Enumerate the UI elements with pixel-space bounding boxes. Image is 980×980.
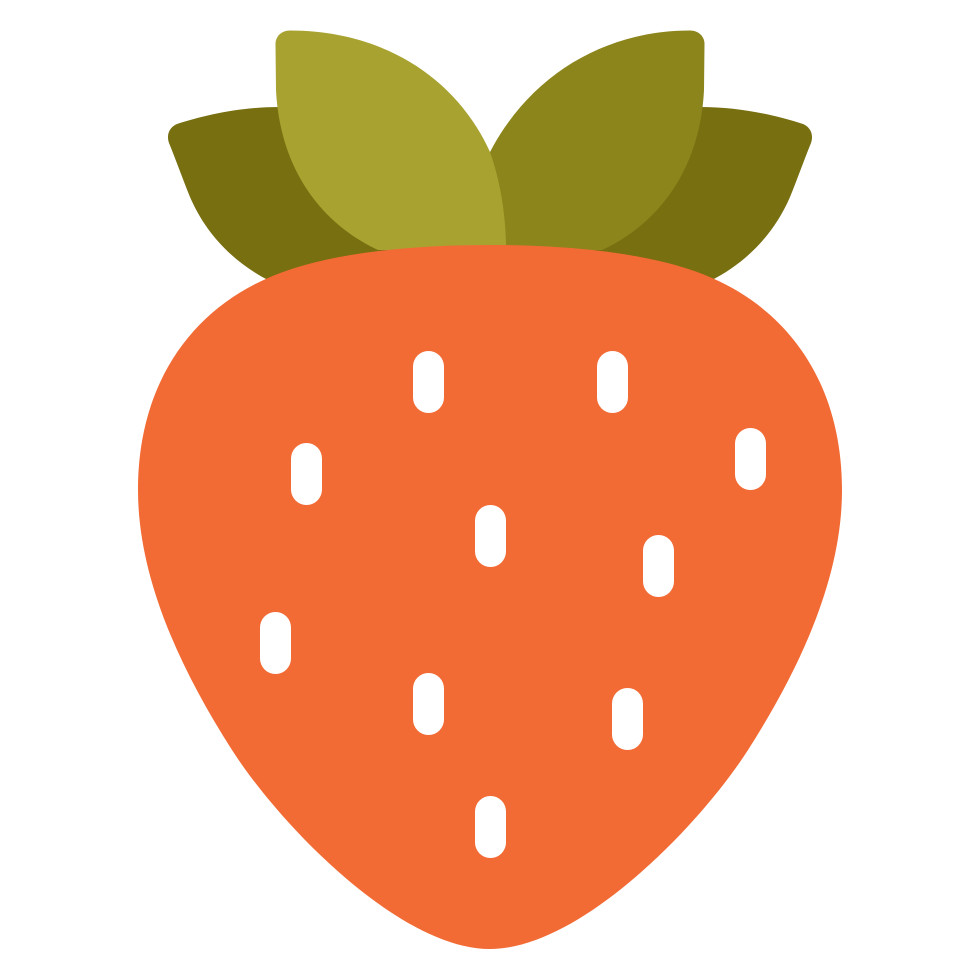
icon: front left leaf: [276, 30, 506, 250]
seed 3: [735, 428, 766, 490]
seed 9: [612, 688, 643, 750]
seeds: [260, 351, 766, 858]
seed 5: [475, 505, 506, 567]
seed 4: [291, 443, 322, 505]
seed 8: [413, 673, 444, 735]
icon: back right leaf: [580, 107, 812, 281]
icon: front right leaf: [490, 30, 704, 250]
seed 10: [475, 796, 506, 858]
icon: back left leaf: [168, 107, 400, 281]
strawberry body: [138, 245, 842, 949]
seed 2: [597, 351, 628, 413]
seed 7: [260, 612, 291, 674]
seed 6: [643, 535, 674, 597]
seed 1: [413, 351, 444, 413]
